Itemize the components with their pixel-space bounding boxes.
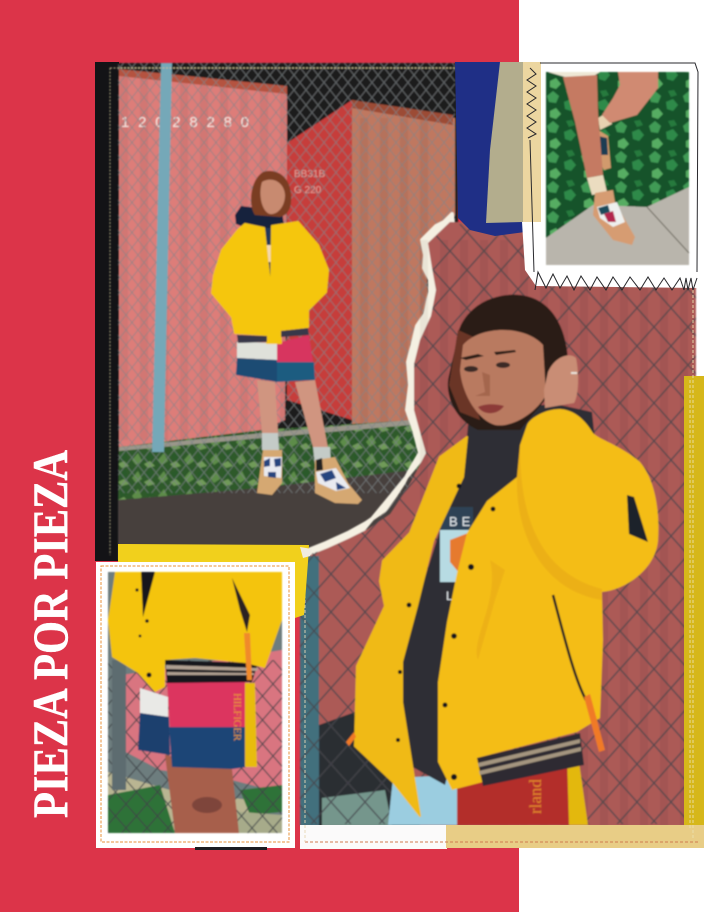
panel: full-length photo: G 220 bbox=[294, 185, 322, 196]
lower-left shadow bbox=[319, 712, 420, 826]
yellow tape: under full-length photo bbox=[118, 544, 309, 618]
jacket ribbing bbox=[237, 328, 309, 343]
chain-link fence bbox=[118, 63, 455, 493]
pink shorts panel bbox=[167, 681, 247, 727]
pink container bbox=[122, 650, 282, 793]
teal pole column bbox=[300, 556, 319, 826]
eyes bbox=[464, 366, 478, 372]
hair bbox=[448, 295, 568, 430]
panel: ankle boot polaroid bbox=[522, 62, 701, 290]
blue pipe bbox=[152, 63, 172, 452]
panel: close-up photo with torn edge bbox=[300, 214, 696, 826]
ring bbox=[571, 372, 577, 374]
brick-red wall bbox=[300, 222, 696, 826]
background bbox=[108, 572, 282, 833]
container code: BB31B bbox=[294, 169, 325, 180]
orange tag left bbox=[346, 732, 356, 746]
tan tape: bottom edge bbox=[446, 825, 704, 848]
green weeds bbox=[108, 785, 282, 833]
orange stitching bbox=[101, 566, 289, 842]
pocket slit bbox=[232, 578, 250, 632]
zipper line bbox=[553, 595, 586, 700]
front boot bbox=[593, 190, 635, 245]
mouth bbox=[478, 404, 504, 413]
face bbox=[260, 180, 285, 214]
yellow tape: right edge bbox=[684, 376, 704, 826]
shorts lettering: rland bbox=[526, 779, 545, 814]
t-shirt bbox=[262, 228, 272, 296]
eyebrows bbox=[460, 350, 516, 360]
tee print box bbox=[441, 507, 473, 531]
yellow shorts panel bbox=[245, 683, 257, 767]
standing leg bbox=[563, 75, 603, 178]
jacket snaps bbox=[135, 588, 152, 678]
hood bbox=[235, 206, 284, 234]
knee shadow bbox=[192, 797, 222, 813]
boot patchwork bbox=[597, 202, 625, 227]
tee letters: BE bbox=[449, 514, 474, 529]
photo stitching bbox=[110, 68, 455, 555]
tee letter lower: L bbox=[446, 589, 453, 603]
ribbing bbox=[165, 660, 258, 683]
jacket bbox=[108, 572, 282, 692]
navy shorts panel bbox=[169, 727, 247, 769]
blue fabric patch bbox=[455, 62, 525, 236]
background: red panel bbox=[0, 0, 519, 912]
right shipping container, rust section bbox=[352, 100, 455, 425]
legs bbox=[257, 380, 328, 448]
white card bbox=[522, 63, 701, 288]
right boot bbox=[315, 457, 362, 504]
red shorts bbox=[457, 762, 570, 825]
sleeve patch bbox=[627, 495, 648, 542]
panel: shorts polaroid bbox=[96, 562, 295, 848]
white strip: bottom edge bbox=[300, 825, 447, 849]
white card bbox=[96, 562, 295, 848]
chain-link fence bbox=[300, 224, 696, 824]
left boot bbox=[257, 450, 282, 495]
rear boot bbox=[598, 130, 611, 170]
hilfiger lettering: HILFIGER bbox=[231, 693, 243, 742]
black stitching bbox=[530, 63, 698, 272]
metal pole bbox=[112, 660, 126, 790]
grey torn tape bbox=[486, 62, 523, 223]
zigzag stitch bottom bbox=[535, 272, 697, 290]
ivy leaves bbox=[546, 72, 689, 265]
jacket right panel and sleeve bbox=[438, 409, 658, 790]
jacket ribbing bbox=[477, 733, 584, 786]
face bbox=[460, 330, 546, 425]
jacket fold shading bbox=[517, 445, 602, 600]
pavement bbox=[546, 187, 689, 265]
photo bbox=[108, 572, 282, 833]
orange zipper tag bbox=[584, 694, 605, 752]
fence bbox=[108, 660, 282, 833]
black tab under card bbox=[195, 847, 267, 850]
white skirt hem bbox=[548, 72, 600, 77]
pavement band bbox=[108, 772, 282, 830]
figure bbox=[346, 295, 658, 825]
nose bbox=[475, 372, 490, 396]
dark hoodie and tee bbox=[400, 405, 595, 785]
zigzag stitch side bbox=[527, 68, 536, 138]
weeds bbox=[118, 420, 420, 500]
yellow shorts panel bbox=[567, 755, 588, 825]
photo backdrop bbox=[118, 63, 458, 553]
pavement crack bbox=[647, 207, 689, 253]
light denim bbox=[388, 775, 458, 825]
raised leg bbox=[602, 72, 658, 123]
left shipping container bbox=[119, 70, 287, 448]
rear sock bbox=[598, 112, 612, 130]
title: PIEZA POR PIEZA bbox=[22, 450, 78, 818]
figure bbox=[212, 171, 362, 504]
jacket snaps bbox=[396, 484, 495, 780]
jacket left panel bbox=[355, 437, 467, 816]
tan tape strip bbox=[523, 62, 541, 222]
shorts bbox=[237, 342, 277, 360]
shorts left panels bbox=[140, 688, 168, 717]
socks bbox=[262, 433, 331, 465]
container number: 1 2 0 2 8 2 8 0 bbox=[121, 114, 249, 131]
jacket placket bbox=[141, 572, 155, 617]
hair bbox=[251, 171, 291, 217]
torn edge corner bbox=[300, 547, 312, 558]
orange tag bbox=[244, 633, 252, 680]
torn paper edge bbox=[305, 214, 470, 570]
jacket bbox=[212, 222, 328, 343]
right shipping container, red section bbox=[287, 100, 352, 420]
ivy background bbox=[546, 72, 689, 265]
photo bbox=[546, 72, 689, 265]
orange tree logo bbox=[450, 533, 470, 574]
wall shading, vertical ribs bbox=[420, 240, 696, 826]
asphalt bbox=[118, 468, 430, 560]
black fabric strip bbox=[95, 62, 119, 561]
legs bbox=[165, 755, 239, 833]
panel: full-length photo bbox=[110, 63, 458, 560]
front sock bbox=[587, 175, 607, 195]
pale pavement patch bbox=[322, 790, 392, 826]
hand bbox=[544, 355, 578, 408]
